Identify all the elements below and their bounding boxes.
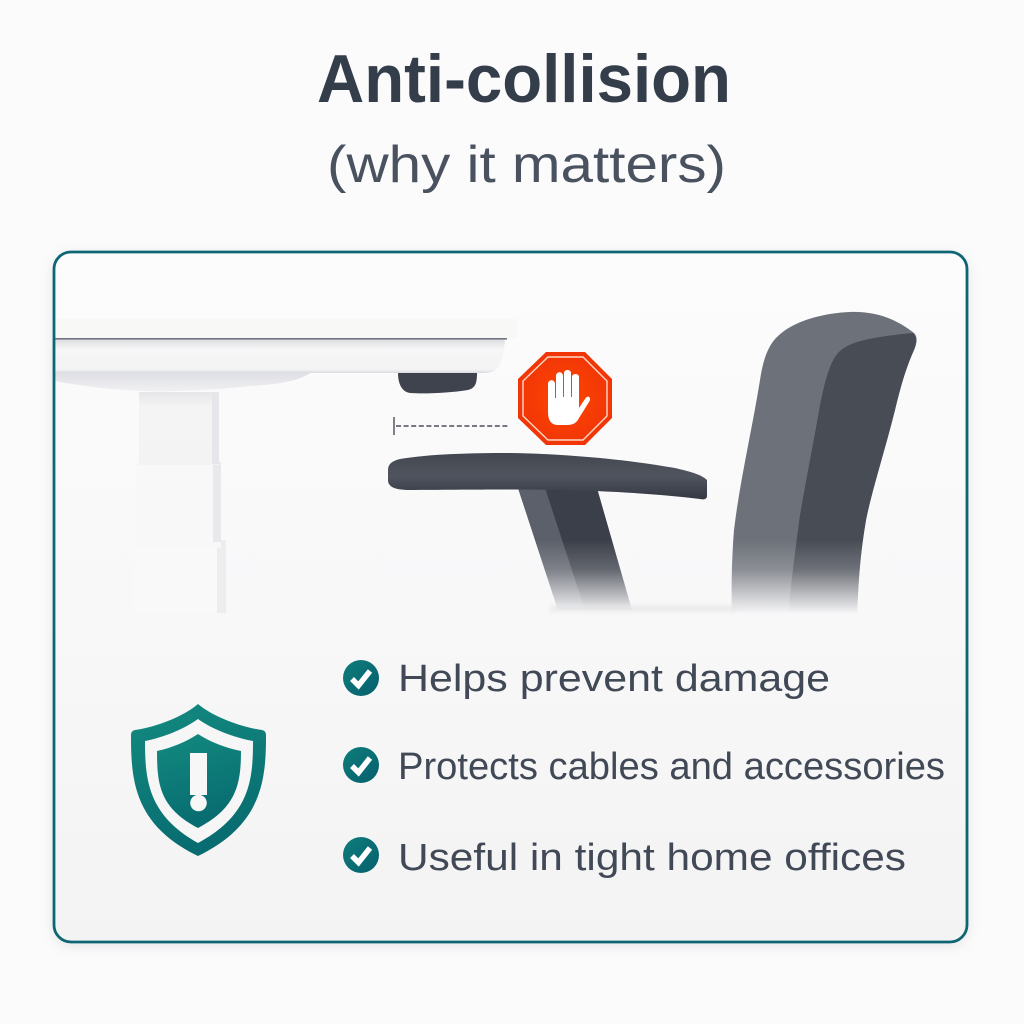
- benefit: protects cables and accessories: Protects cables and accessories: [398, 746, 945, 788]
- icon: stop sign with hand: [518, 352, 612, 445]
- desk leg: [134, 392, 226, 613]
- benefit: helps prevent damage: Helps prevent damage: [398, 658, 830, 700]
- benefit: useful in tight home offices: Useful in tight home offices: [398, 837, 906, 879]
- desk apron: [55, 339, 505, 373]
- subtitle: (why it matters): [327, 136, 726, 194]
- panel: anti-collision illustration and benefits: [54, 252, 967, 942]
- chair back: [732, 312, 917, 620]
- illustration: standing desk: [55, 319, 517, 613]
- icon: shield with exclamation mark: [131, 704, 266, 856]
- hand: [548, 370, 590, 425]
- title: Anti-collision: [317, 41, 731, 117]
- armrest post: [518, 488, 632, 610]
- floor shadow: [552, 606, 732, 611]
- desk top: [55, 319, 517, 338]
- armrest: [388, 453, 707, 499]
- anti-collision sensor: [398, 373, 477, 393]
- clearance dashed line: [394, 417, 510, 435]
- illustration: office chair: [518, 312, 917, 620]
- desk underside curve: [55, 372, 312, 391]
